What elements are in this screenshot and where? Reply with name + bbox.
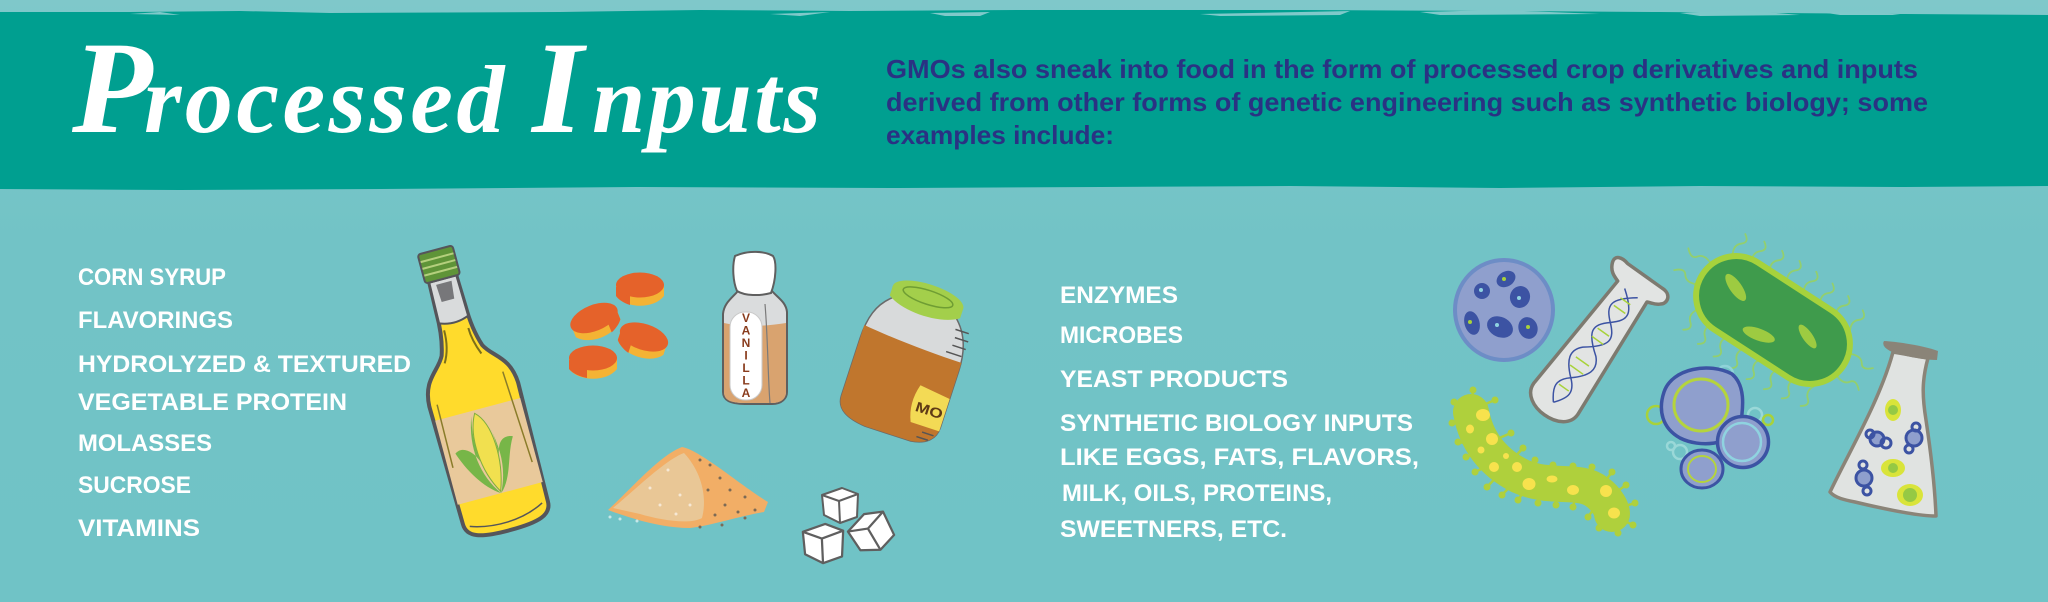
vanilla label text: A	[742, 324, 751, 338]
right ingredient list: LIKE EGGS, FATS, FLAVORS,	[1060, 444, 1419, 471]
right ingredient list: SWEETNERS, ETC.	[1060, 516, 1287, 543]
left ingredient list: CORN SYRUP	[78, 264, 226, 291]
intro paragraph: GMOs also sneak into food in the form of processed crop derivatives and inputs	[886, 54, 1918, 84]
left ingredient list: MOLASSES	[78, 430, 212, 457]
vanilla label text: L	[742, 374, 750, 388]
left ingredient list: FLAVORINGS	[78, 307, 233, 334]
icon: molasses jar	[835, 269, 981, 448]
left ingredient list: VITAMINS	[78, 515, 200, 542]
right ingredient list: ENZYMES	[1060, 282, 1178, 309]
vanilla label text: A	[742, 386, 751, 400]
icon: test tube with DNA	[1517, 255, 1671, 434]
left ingredient list	[78, 264, 411, 542]
banner	[0, 10, 2048, 190]
title: nputs	[592, 46, 823, 153]
icon: lab flask with cells	[1830, 341, 1938, 516]
icon: brown sugar pile	[608, 447, 768, 528]
right ingredient list: SYNTHETIC BIOLOGY INPUTS	[1060, 410, 1413, 437]
icon: corn oil bottle	[391, 238, 554, 542]
icon: vitamin tablets	[566, 272, 672, 379]
title: P	[71, 14, 154, 161]
intro paragraph	[886, 54, 1928, 150]
vanilla label text: L	[742, 361, 750, 375]
right ingredient list: YEAST PRODUCTS	[1060, 366, 1288, 393]
icon: cluster of yeast cells	[1647, 366, 1773, 488]
vanilla label text: I	[744, 348, 748, 362]
icon: round cell with nuclei	[1455, 260, 1553, 360]
vanilla label text: N	[742, 336, 750, 350]
right ingredient list: MICROBES	[1060, 322, 1183, 349]
icon: corn cob on label	[447, 405, 526, 502]
icon: sugar cubes	[803, 488, 898, 563]
left ingredient list: VEGETABLE PROTEIN	[78, 389, 347, 416]
icon: spiky yellow-green microbe	[1448, 386, 1638, 536]
jar label text: MO	[913, 398, 945, 422]
left ingredient list: SUCROSE	[78, 472, 191, 499]
left ingredient list: HYDROLYZED & TEXTURED	[78, 351, 411, 378]
DNA helix	[1542, 285, 1642, 410]
intro paragraph: derived from other forms of genetic engineering such as synthetic biology; some	[886, 87, 1928, 117]
intro paragraph: examples include:	[886, 120, 1114, 150]
icon: green bacterium with flagella	[1646, 206, 1900, 434]
title: I	[530, 14, 588, 161]
title: rocessed	[144, 46, 508, 153]
right ingredient list	[1060, 282, 1419, 543]
icon: vanilla bottle	[723, 252, 787, 404]
right ingredient list: MILK, OILS, PROTEINS,	[1062, 480, 1332, 507]
vanilla label text: V	[742, 311, 750, 325]
